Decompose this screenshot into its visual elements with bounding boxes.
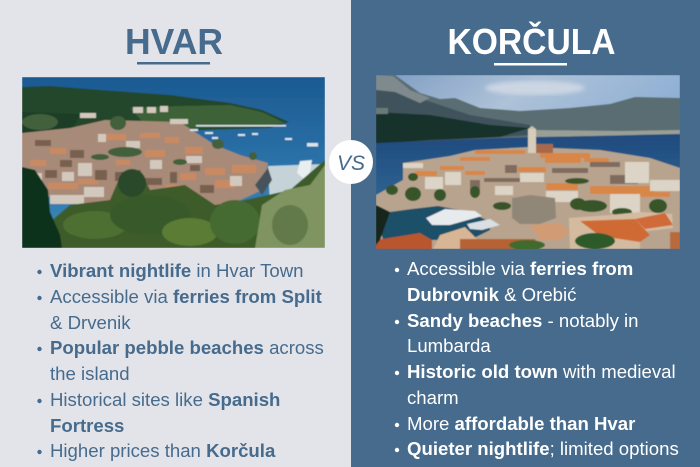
bullet text: nightlife: Quieter nightlife; limited options — [407, 438, 679, 459]
bullet list: Hvar — [37, 260, 324, 461]
heading underline: Hvar — [137, 62, 210, 64]
bullet text continuation: Lumbarda: Lumbarda — [407, 335, 491, 356]
bullet text continuation: Fortress: Fortress — [50, 415, 124, 436]
heading underline: Korčula — [494, 63, 567, 66]
badge: VS: VS — [337, 152, 365, 175]
bullet text: prices: Higher prices than Korčula — [50, 440, 276, 461]
bullet dots: Korčula — [395, 268, 399, 452]
bullet text: affordability: More affordable than Hvar — [407, 413, 635, 434]
bullet text continuation: the island: the island — [50, 363, 130, 384]
bullet text: old town: Historic old town with medieval — [407, 361, 676, 382]
photo: Korčula old town — [376, 75, 680, 250]
bullet text: historical sites: Historical sites like Spanish — [50, 389, 280, 410]
bullet dots: Hvar — [37, 270, 42, 454]
panel: Hvar — [22, 29, 325, 461]
badge: VS — [329, 140, 373, 184]
bullet text: ferries: Accessible via ferries from Split — [50, 286, 322, 307]
bullet text: beaches: Popular pebble beaches across — [50, 337, 324, 358]
bullet text: nightlife: Vibrant nightlife in Hvar Town — [50, 260, 304, 281]
bullet text continuation: Drvenik: & Drvenik — [50, 312, 131, 333]
bullet list: Korčula — [395, 258, 679, 459]
panel: Korčula — [351, 0, 700, 467]
bullet text: beaches: Sandy beaches - notably in — [407, 310, 639, 331]
heading: HVAR: HVAR — [125, 21, 223, 62]
photo: Hvar harbour — [22, 77, 325, 248]
bullet text: ferries: Accessible via ferries from — [407, 258, 633, 279]
bullet text continuation: charm: charm — [407, 387, 459, 408]
heading: KORČULA: KORČULA — [448, 20, 616, 62]
bullet text continuation: Dubrovnik: Dubrovnik & Orebić — [407, 284, 576, 305]
